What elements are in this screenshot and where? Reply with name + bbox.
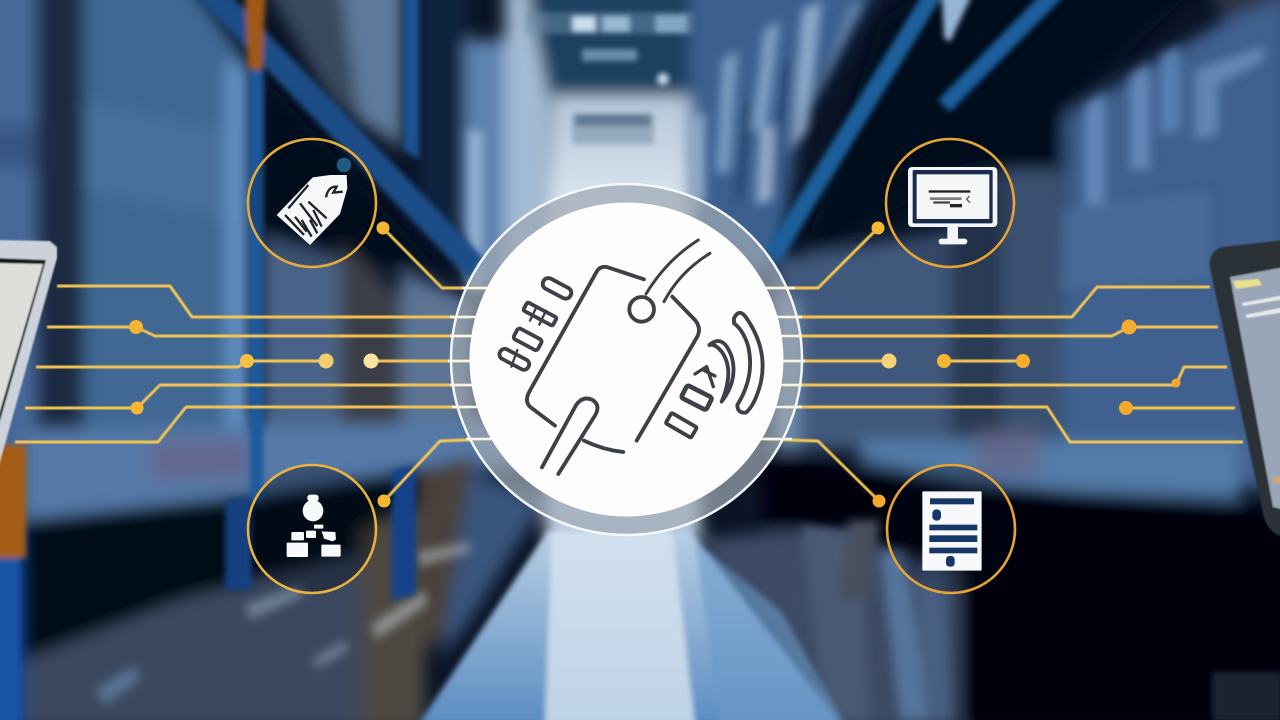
central hub rings <box>448 184 805 535</box>
panel: left tablet <box>0 240 57 480</box>
left lower storey <box>28 420 560 522</box>
panel: right tablet <box>1210 240 1280 536</box>
ceiling and central aisle <box>525 0 705 96</box>
circuit node dots <box>129 222 1180 508</box>
right upper storey <box>690 0 880 300</box>
icon ring: computer monitor <box>886 139 1014 267</box>
ceiling details <box>526 12 694 34</box>
icon: org chart <box>287 495 341 557</box>
icon ring: price tag <box>248 139 376 267</box>
icon: RFID tag with signal waves <box>498 240 763 474</box>
circuit lines: right side <box>765 228 1243 501</box>
icon: monitor <box>908 167 997 244</box>
icon: document list <box>922 491 982 571</box>
circuit lines: left side <box>15 228 490 501</box>
icon ring: hierarchy <box>248 465 376 593</box>
icon ring: document <box>887 465 1015 593</box>
icon: barcode tag <box>277 158 351 245</box>
